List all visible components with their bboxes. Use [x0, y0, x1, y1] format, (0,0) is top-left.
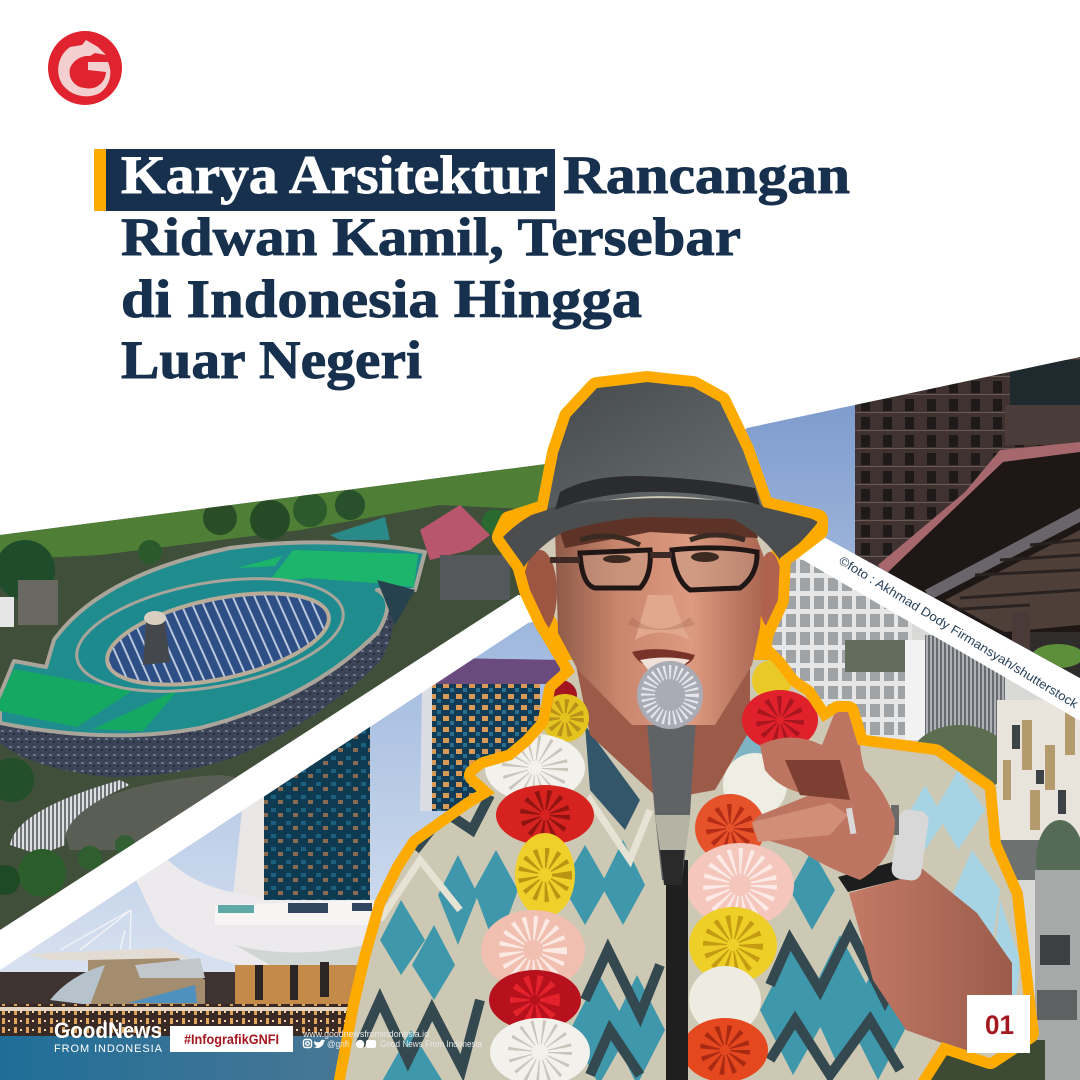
- face: [523, 513, 782, 725]
- museum inner ring: [75, 577, 345, 693]
- forehead shadow: [555, 513, 758, 548]
- museum spiral ramp: [66, 775, 236, 850]
- trees: [918, 725, 997, 785]
- photo: apartment buildings lower right: [760, 530, 1080, 1080]
- grey building: [1035, 870, 1080, 1080]
- apartment tower middle: [925, 635, 1005, 740]
- right ear: [758, 552, 782, 628]
- footer brand: GoodNews from Indonesia: [54, 1018, 163, 1055]
- page number badge: [967, 995, 1030, 1053]
- esplanade: [0, 972, 235, 1004]
- photo credit: ©foto : Akhmad Dody Firmansyah/shutterstock: [836, 554, 1080, 712]
- page number badge: 01: [985, 1010, 1014, 1040]
- footer handle: @gnfi: [327, 1039, 349, 1049]
- museum cylinder: [143, 622, 170, 665]
- right garland: [682, 660, 818, 1080]
- lit waterfront: [235, 965, 357, 1004]
- hat band: [555, 476, 760, 510]
- foliage: [920, 1040, 1045, 1080]
- museum wall: [0, 610, 394, 777]
- batik shirt: [340, 660, 1040, 1080]
- water: [0, 1036, 342, 1080]
- glasses: [550, 548, 757, 590]
- hashtag badge: [170, 1026, 293, 1052]
- icon: facebook: [356, 1040, 364, 1048]
- mouth: [632, 649, 695, 668]
- microphone: [645, 700, 697, 885]
- wristwatch: [838, 805, 930, 892]
- eyes: [603, 555, 631, 563]
- photo: museum from above: [0, 460, 560, 940]
- photo: high-rise top right: [746, 357, 1080, 678]
- right arm: [849, 867, 1012, 1052]
- microphone stand: [666, 860, 688, 1080]
- grey beam: [925, 508, 1080, 600]
- person: Ridwan Kamil: [340, 382, 1040, 1080]
- photo: Marina Bay Sands, Singapore: [0, 620, 620, 1080]
- left garland: [481, 679, 594, 1080]
- tower two: [432, 684, 540, 811]
- dark soffit: [884, 452, 1080, 678]
- hat brim: [503, 498, 818, 568]
- tan apartment block: [997, 700, 1080, 840]
- title highlight box: [106, 149, 555, 211]
- nose: [635, 595, 690, 640]
- collar: [586, 728, 762, 830]
- footer brand subtitle: FROM INDONESIA: [54, 1043, 163, 1055]
- footer brand: GoodNews from Indonesia: GoodNews: [54, 1018, 162, 1043]
- title: [94, 145, 850, 390]
- title line 1 highlighted: Karya Arsitektur: [121, 145, 548, 205]
- eyebrows: [580, 535, 745, 545]
- icon: twitter: [314, 1040, 325, 1048]
- pink beam: [878, 442, 1080, 575]
- neck: [576, 666, 750, 794]
- museum roof: [0, 542, 425, 735]
- footer page name: Good News From Indonesia: [380, 1039, 482, 1049]
- footer website: www.goodnewsfromindonesia.id: [302, 1029, 429, 1040]
- hat crown: [545, 382, 765, 515]
- title accent bar: [94, 149, 106, 211]
- hand: [752, 710, 895, 880]
- hashtag badge: #InfografikGNFI: [184, 1032, 279, 1047]
- title line 2: Ridwan Kamil, Tersebar: [121, 207, 741, 267]
- icon: instagram: [304, 1040, 312, 1048]
- skypark: [425, 658, 560, 684]
- icon: youtube: [366, 1040, 376, 1048]
- tower one: [264, 723, 370, 905]
- title line 4: Luar Negeri: [121, 330, 422, 390]
- left ear: [523, 550, 557, 634]
- logo: GNFI red dragon emblem: [48, 31, 122, 105]
- microphone head: [637, 661, 703, 729]
- title line 1 rest: Rancangan: [563, 145, 850, 205]
- garland dark flower: [551, 680, 577, 710]
- art science lotus: [136, 860, 375, 972]
- hat: [503, 382, 818, 568]
- pergola slats: [945, 530, 1080, 632]
- person outline: [345, 382, 1028, 1080]
- apartment block left: [770, 555, 912, 740]
- bridge cables: [60, 910, 131, 950]
- title line 3: di Indonesia Hingga: [121, 269, 642, 329]
- museum dome: [105, 591, 331, 687]
- face skin: [555, 520, 765, 725]
